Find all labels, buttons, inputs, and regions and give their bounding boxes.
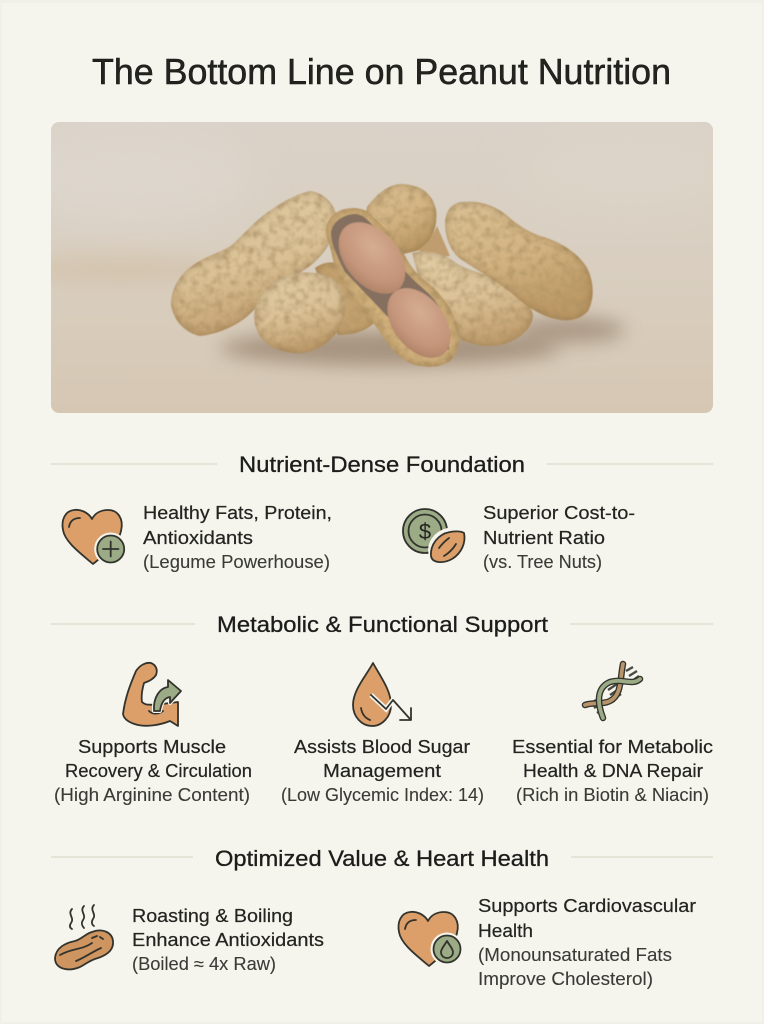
rear filler peanut	[418, 226, 450, 258]
text: muscle recovery	[54, 737, 252, 805]
text: healthy fats: Healthy Fats, Protein,	[143, 503, 332, 523]
text: muscle recovery: Recovery & Circulation	[65, 761, 252, 781]
title: The Bottom Line on Peanut Nutrition	[92, 51, 671, 92]
text: healthy fats: Antioxidants	[143, 528, 253, 548]
icon: flexed arm with arrow	[123, 663, 182, 726]
text: healthy fats	[143, 503, 332, 572]
icon: blood drop with falling arrow	[353, 663, 411, 726]
hero photo: peanuts	[10, 122, 740, 413]
section heading: Optimized Value & Heart Health: Optimized Value & Heart Health	[215, 846, 549, 871]
text: cost-to-nutrient: Nutrient Ratio	[483, 528, 605, 548]
icon: heart with plus	[62, 510, 127, 566]
text: cardiovascular: Supports Cardiovascular	[478, 896, 696, 916]
text: cardiovascular	[478, 896, 696, 989]
middle right peanut	[412, 252, 533, 346]
text: metabolic health: Health & DNA Repair	[523, 761, 703, 781]
text: roasting and boiling: Roasting & Boiling	[132, 906, 293, 926]
text: muscle recovery: Supports Muscle	[78, 737, 226, 757]
section heading: Nutrient-Dense Foundation: Nutrient-Dense Foundation	[239, 452, 525, 477]
text: healthy fats: (Legume Powerhouse)	[143, 552, 330, 572]
text: blood sugar: Management	[323, 761, 441, 781]
icon: coin and peanut	[403, 509, 476, 574]
text: metabolic health: (Rich in Biotin & Niacin)	[516, 785, 709, 805]
shell inner	[331, 214, 449, 350]
rear peanut behind small one	[315, 262, 375, 335]
text: roasting and boiling: (Boiled ≈ 4x Raw)	[132, 954, 276, 974]
text: cost-to-nutrient: (vs. Tree Nuts)	[483, 552, 602, 572]
open shell	[326, 208, 459, 367]
section heading: Metabolic & Functional Support: Metabolic & Functional Support	[217, 612, 548, 637]
text: cost-to-nutrient: Superior Cost-to-	[483, 503, 635, 523]
kernel top	[338, 222, 406, 294]
icon: DNA helix	[585, 664, 640, 718]
text: cardiovascular: Health	[478, 921, 533, 941]
text: cost-to-nutrient	[483, 503, 635, 572]
left large peanut	[171, 191, 336, 336]
text: blood sugar	[281, 737, 484, 805]
text: roasting and boiling	[132, 906, 324, 974]
icon: coin and peanut: $	[419, 519, 431, 544]
text: blood sugar: (Low Glycemic Index: 14)	[281, 785, 484, 805]
text: cardiovascular: Improve Cholesterol)	[478, 969, 653, 989]
small round peanut	[254, 272, 345, 353]
text: roasting and boiling: Enhance Antioxidants	[132, 930, 324, 950]
back top peanut	[365, 184, 436, 256]
shadow under peanuts	[220, 330, 560, 366]
text: muscle recovery: (High Arginine Content)	[54, 785, 250, 805]
kernel bottom	[387, 288, 450, 358]
text: metabolic health	[512, 737, 713, 805]
icon: heart with oil drop	[398, 912, 464, 966]
icon: steaming peanut	[55, 905, 113, 969]
text: blood sugar: Assists Blood Sugar	[294, 737, 470, 757]
right peanut	[445, 202, 593, 320]
text: metabolic health: Essential for Metabolic	[512, 737, 713, 757]
text: cardiovascular: (Monounsaturated Fats	[478, 945, 672, 965]
